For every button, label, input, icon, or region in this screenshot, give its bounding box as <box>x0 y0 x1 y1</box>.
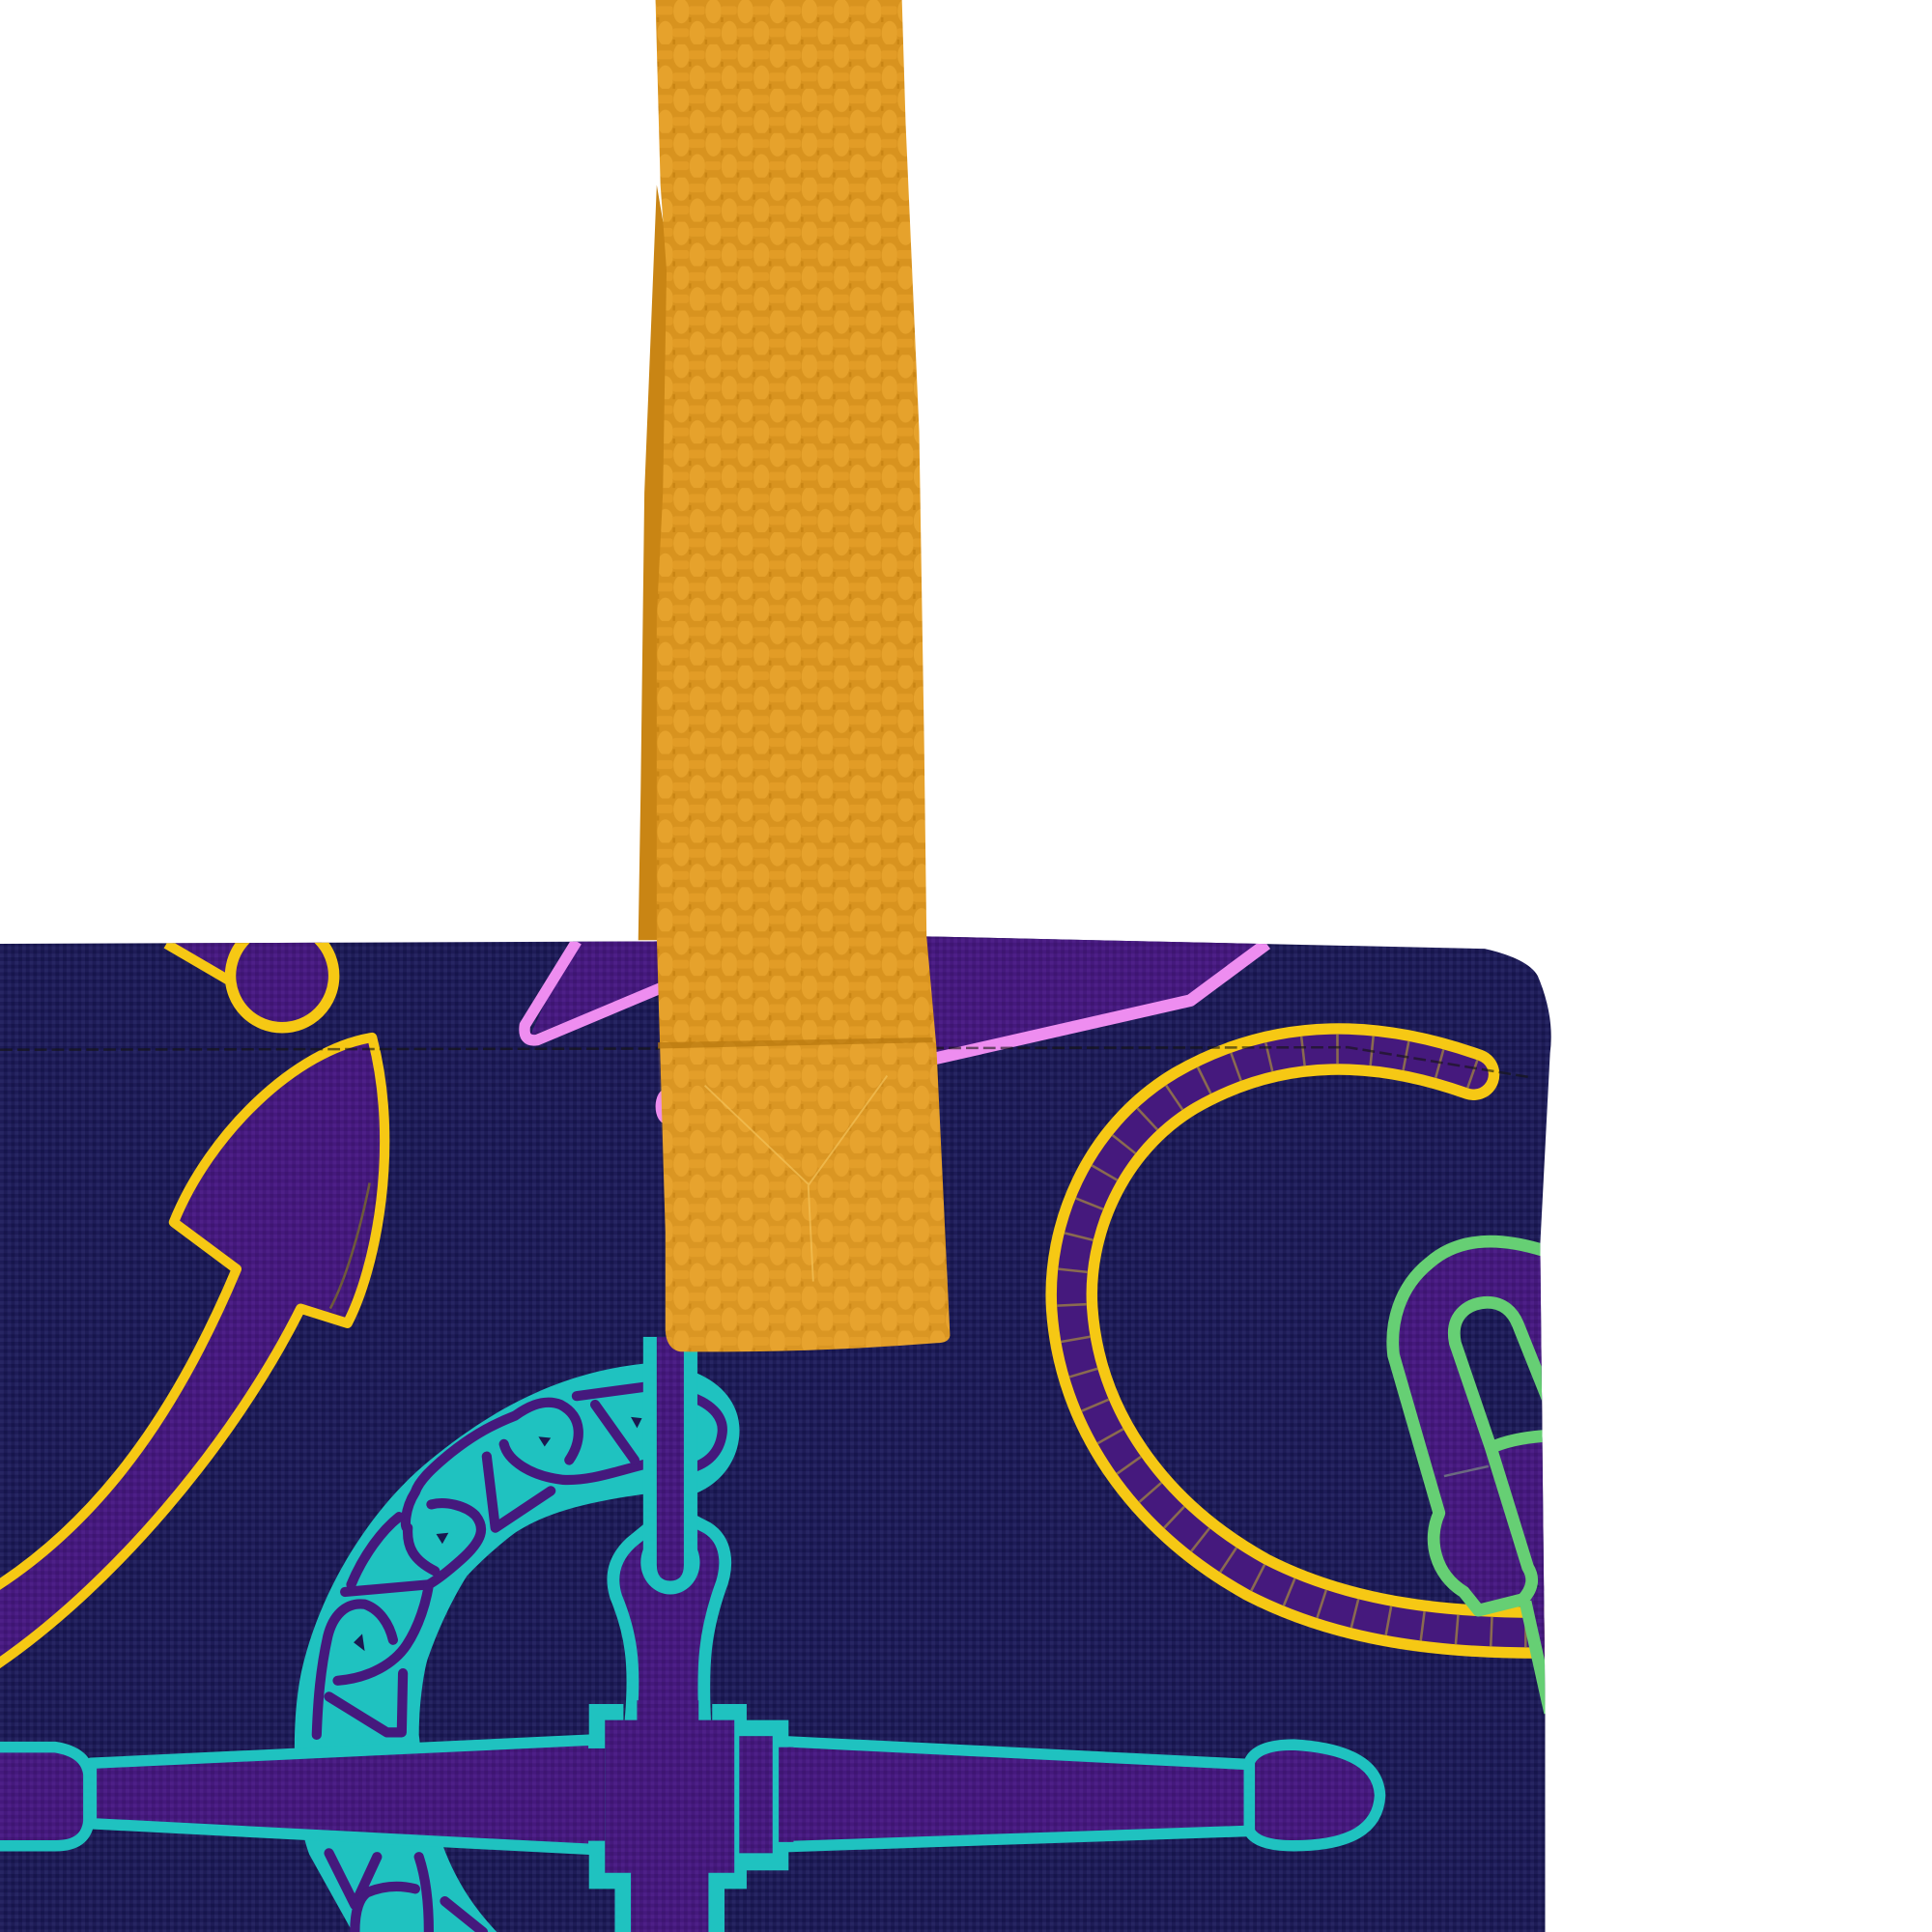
strap front <box>656 0 950 1351</box>
strap fold <box>658 1037 933 1048</box>
ring interlace <box>317 1386 650 1932</box>
motif: teal bit bar <box>0 1700 1380 1932</box>
strap stitching <box>705 1076 887 1282</box>
strap back layer <box>639 185 671 940</box>
knot <box>697 1374 740 1493</box>
stitch line <box>0 1047 1528 1077</box>
motif: teal stem <box>640 1337 699 1595</box>
printed pattern <box>0 924 1555 1932</box>
motif: yellow arrow <box>0 1037 384 1671</box>
centre block <box>589 1704 788 1932</box>
motif: yellow rope whip <box>1071 1049 1552 1633</box>
motif: teal shank <box>613 1509 725 1720</box>
ring band <box>295 1361 671 1932</box>
strap lower panel <box>658 1042 950 1351</box>
motif: green shackle <box>1393 1241 1555 1713</box>
ring dots <box>354 1417 642 1651</box>
motif: teal ornate ring <box>295 1361 740 1932</box>
motif: pink blade <box>525 934 1269 1123</box>
motif: top ring in yellow <box>166 924 334 1028</box>
orange webbing strap <box>639 0 950 1351</box>
tote bag body <box>0 936 1551 1932</box>
